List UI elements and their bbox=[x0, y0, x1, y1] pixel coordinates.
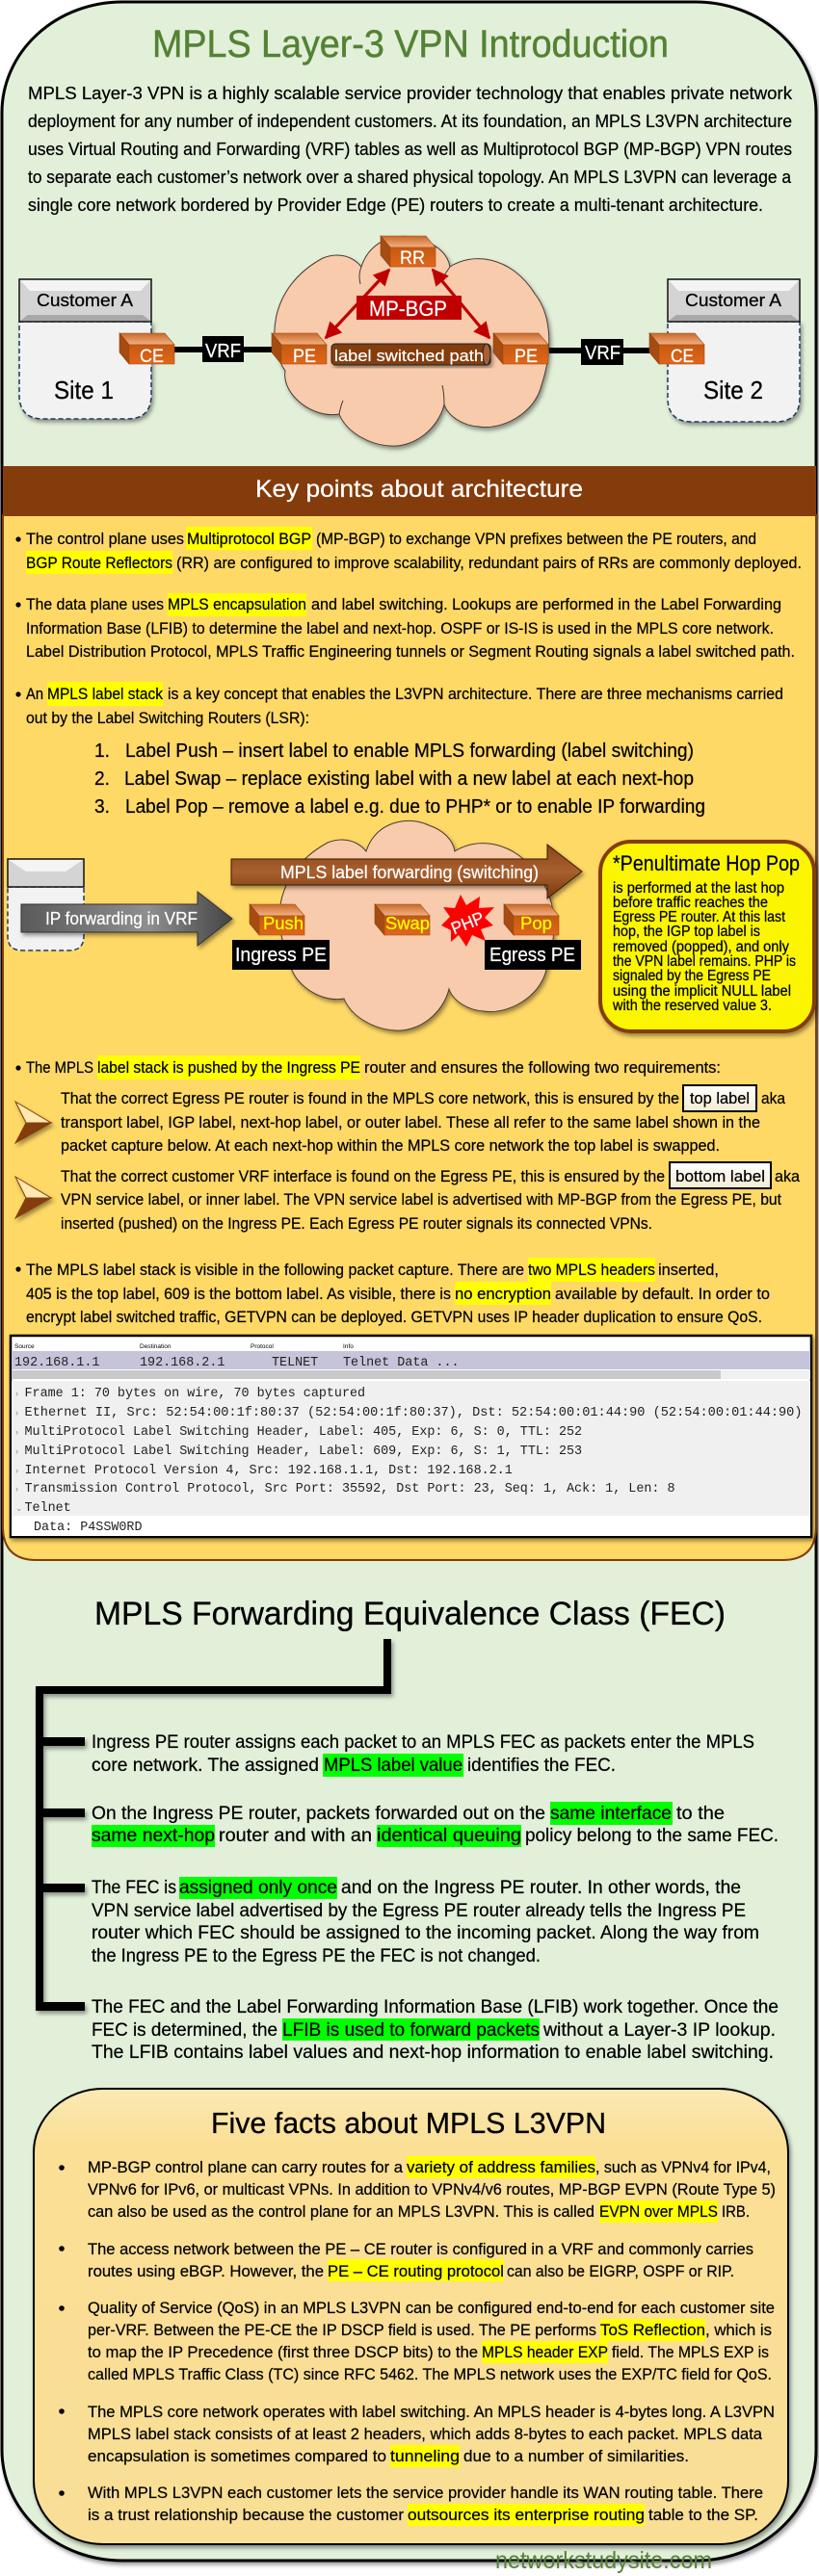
PHP burst bbox=[441, 895, 494, 947]
bullet: label stack: out by the Label Switching Routers (LSR): bbox=[26, 709, 309, 727]
bullet: packet capture explanation: encrypt label switched traffic, GETVPN can be deployed. GETVPN uses IP header duplication to ensure QoS. bbox=[26, 1308, 762, 1326]
fact 2: PE – CE routing protocol bbox=[328, 2262, 504, 2280]
FEC point 3: The FEC is bbox=[92, 1878, 176, 1898]
callout: Penultimate Hop Pop: before traffic reaches the bbox=[613, 895, 768, 911]
fact 2: can also be EIGRP, OSPF or RIP. bbox=[507, 2262, 734, 2280]
requirement: bottom label: VPN service label, or inner label. The VPN service label is advertised with MP-BGP from the Egress PE, but bbox=[61, 1190, 781, 1209]
intro text block: to separate each customer’s network over a shared physical topology. An MPLS L3VPN can leverage a bbox=[28, 168, 792, 187]
customer A site 1: Customer A bbox=[37, 291, 133, 310]
bullet: data plane: and label switching. Lookups are performed in the Label Forwarding bbox=[311, 595, 781, 613]
numbered list: label operations: Label Swap – replace existing label with a new label at each next-hop bbox=[124, 768, 694, 790]
fact 1: IRB. bbox=[722, 2202, 750, 2221]
scrollbar bbox=[12, 1370, 810, 1379]
customer A site 2: Site 2 bbox=[703, 376, 763, 404]
requirement: top label: aka bbox=[761, 1089, 785, 1107]
Ingress PE label: Ingress PE bbox=[235, 945, 327, 966]
bullet: label stack: An bbox=[26, 685, 43, 703]
fact 3: per-VRF. Between the PE-CE the IP DSCP field is used. The PE performs bbox=[88, 2321, 596, 2339]
fact 1: VPNv6 for IPv6, or multicast VPNs. In addition to VPNv4/v6 routes, MP-BGP EVPN (Route Type 5) bbox=[88, 2180, 776, 2199]
packet detail tree: Internet Protocol Version 4, Src: 192.168.1.1, Dst: 192.168.2.1 bbox=[25, 1464, 513, 1478]
customer site box bbox=[8, 859, 84, 950]
router PE right: PE bbox=[515, 347, 538, 367]
diagram: MPLS L3VPN topology bbox=[19, 236, 800, 446]
FEC point 1: identifies the FEC. bbox=[467, 1756, 616, 1776]
router PE left bbox=[272, 333, 327, 367]
FEC point 4 bbox=[92, 1997, 779, 2063]
packet detail tree: Telnet bbox=[25, 1501, 71, 1516]
fact 3: Quality of Service (QoS) in an MPLS L3VPN can be configured end-to-end for each customer site bbox=[88, 2299, 775, 2317]
numbered list: label operations: 2. bbox=[94, 768, 110, 790]
FEC point 4: The FEC and the Label Forwarding Information Base (LFIB) work together. Once the bbox=[92, 1997, 779, 2017]
callout: Penultimate Hop Pop: removed (popped), and only bbox=[613, 939, 789, 955]
requirement: bottom label: aka bbox=[775, 1167, 801, 1185]
requirement: bottom label: That the correct customer VRF interface is found on the Egress PE, this is ensured by the bbox=[61, 1167, 665, 1185]
selected packet row: 192.168.1.1 bbox=[14, 1356, 99, 1370]
column headers: Destination bbox=[140, 1343, 172, 1350]
bullet: data plane: MPLS encapsulation bbox=[168, 595, 306, 613]
packet detail tree: › bbox=[15, 1427, 18, 1437]
bullet: label stack requirements: router and ensures the following two requirements: bbox=[364, 1058, 721, 1077]
fact 3: MPLS header EXP bbox=[482, 2343, 608, 2361]
boxed term: bottom label bbox=[670, 1162, 771, 1188]
FEC point 2: On the Ingress PE router, packets forwarded out on the bbox=[92, 1804, 545, 1824]
packet detail tree: Transmission Control Protocol, Src Port: 35592, Dst Port: 23, Seq: 1, Ack: 1, Len: 8 bbox=[25, 1482, 674, 1496]
selected packet row: Telnet Data ... bbox=[343, 1356, 460, 1370]
FEC point 1: MPLS label value bbox=[324, 1756, 462, 1776]
bullet: packet capture explanation: two MPLS headers bbox=[528, 1261, 655, 1279]
requirement: top label bbox=[61, 1085, 785, 1155]
callout: Penultimate Hop Pop: is performed at the last hop bbox=[613, 880, 784, 897]
VRF label left: VRF bbox=[205, 341, 241, 362]
packet capture window bbox=[11, 1336, 811, 1537]
packet detail tree: › bbox=[15, 1484, 18, 1494]
heading: FEC: MPLS Forwarding Equivalence Class (FEC) bbox=[94, 1596, 726, 1632]
callout: Penultimate Hop Pop: hop, the IGP top label is bbox=[613, 924, 760, 940]
selected packet row: TELNET bbox=[272, 1356, 318, 1370]
arrow: IP forwarding in VRF: IP forwarding in VRF bbox=[45, 909, 198, 928]
website credit: networkstudysite.com bbox=[495, 2547, 712, 2574]
bullet: packet capture explanation bbox=[15, 1258, 770, 1326]
bullet: data plane: The data plane uses bbox=[26, 595, 164, 613]
FEC point 3: the Ingress PE to the Egress PE the FEC is not changed. bbox=[92, 1946, 541, 1966]
FEC point 3 bbox=[92, 1877, 759, 1966]
FEC point 2: same next-hop bbox=[92, 1826, 215, 1846]
router CE right bbox=[649, 333, 704, 367]
router PE left: PE bbox=[293, 347, 316, 367]
FEC point 2: same interface bbox=[550, 1804, 672, 1824]
router CE left bbox=[119, 333, 174, 367]
router Push bbox=[250, 904, 304, 935]
bullet: data plane: Information Base (LFIB) to determine the label and next-hop. OSPF or IS-IS is used in the MPLS core network. bbox=[26, 619, 774, 637]
title: MPLS Layer-3 VPN Introduction bbox=[152, 23, 669, 65]
packet detail tree: Data: P4SSW0RD bbox=[34, 1521, 143, 1535]
callout: Penultimate Hop Pop: using the implicit NULL label bbox=[613, 983, 791, 1000]
fact 4: tunneling bbox=[390, 2447, 460, 2465]
packet detail tree: MultiProtocol Label Switching Header, Label: 405, Exp: 6, S: 0, TTL: 252 bbox=[25, 1425, 582, 1440]
packet detail tree: › bbox=[15, 1408, 18, 1418]
fact 1 bbox=[59, 2156, 776, 2223]
column headers: Protocol bbox=[251, 1343, 274, 1350]
bullet: packet capture explanation: no encryption bbox=[455, 1285, 551, 1303]
bullet: control plane: Multiprotocol BGP bbox=[187, 530, 311, 548]
packet detail tree: Frame 1: 70 bytes on wire, 70 bytes captured bbox=[25, 1387, 365, 1401]
requirement: top label: packet capture below. At each next-hop within the MPLS core network the top label is swapped. bbox=[61, 1136, 720, 1155]
VRF label right: VRF bbox=[585, 343, 621, 364]
router Push: Push bbox=[263, 914, 304, 933]
diagram: label operations bbox=[8, 820, 814, 1031]
fact 2: The access network between the PE – CE router is configured in a VRF and commonly carries bbox=[88, 2240, 753, 2258]
callout: Penultimate Hop Pop: the VPN label remains. PHP is bbox=[613, 953, 796, 970]
fact 1: MP-BGP control plane can carry routes for a bbox=[88, 2158, 404, 2176]
arrow: MPLS label forwarding bbox=[231, 845, 582, 898]
packet detail tree bbox=[12, 1381, 810, 1536]
router PE right bbox=[493, 333, 548, 367]
bullet: label stack: is a key concept that enables the L3VPN architecture. There are three mechanisms carried bbox=[168, 685, 783, 703]
cloud: MPLS core bbox=[279, 820, 554, 1030]
panel background bbox=[3, 515, 816, 1560]
icon: arrow bullet 2 bbox=[15, 1177, 51, 1218]
fact 3 bbox=[59, 2299, 775, 2383]
router Swap: Swap bbox=[385, 914, 430, 933]
packet detail tree: ⌄ bbox=[15, 1503, 23, 1513]
bullet: control plane: (MP-BGP) to exchange VPN prefixes between the PE routers, and bbox=[316, 530, 756, 548]
FEC point 3: router which FEC should be assigned to the incoming packet. Along the way from bbox=[92, 1923, 759, 1943]
router Pop bbox=[504, 904, 559, 935]
Ingress PE label bbox=[232, 940, 330, 970]
selected packet row bbox=[12, 1351, 810, 1370]
router RR: RR bbox=[400, 248, 425, 269]
numbered list: label operations: Label Pop – remove a label e.g. due to PHP* or to enable IP forwarding bbox=[125, 796, 705, 818]
bullet: packet capture explanation: available by default. In order to bbox=[555, 1285, 770, 1303]
FEC point 3: VPN service label advertised by the Egress PE router already tells the Ingress PE bbox=[92, 1901, 746, 1921]
fact 3: field. The MPLS EXP is bbox=[612, 2343, 769, 2361]
column headers bbox=[14, 1343, 354, 1350]
numbered list: label operations: Label Push – insert label to enable MPLS forwarding (label switching) bbox=[125, 741, 694, 762]
fact 5: outsources its enterprise routing bbox=[408, 2506, 645, 2524]
packet detail tree: Ethernet II, Src: 52:54:00:1f:80:37 (52:54:00:1f:80:37), Dst: 52:54:00:01:44:90 (52:54:00:01:44:90) bbox=[25, 1406, 802, 1420]
intro text block: MPLS Layer-3 VPN is a highly scalable service provider technology that enables private network bbox=[28, 84, 793, 103]
bullet: label stack requirements: The MPLS bbox=[26, 1058, 93, 1077]
fact 3: called MPLS Traffic Class (TC) since RFC 5462. The MPLS network uses the EXP/TC field for QoS. bbox=[88, 2365, 772, 2383]
fact 3: , which is bbox=[705, 2321, 772, 2339]
Egress PE label: Egress PE bbox=[489, 945, 575, 966]
callout: Penultimate Hop Pop bbox=[600, 842, 814, 1031]
label switched path tube: label switched path bbox=[334, 347, 484, 365]
callout: Penultimate Hop Pop: signaled by the Egress PE bbox=[613, 968, 771, 984]
heading: five facts: Five facts about MPLS L3VPN bbox=[211, 2106, 606, 2140]
bullet: label stack requirements bbox=[15, 1055, 721, 1080]
MP-BGP label: MP-BGP bbox=[369, 297, 447, 321]
FEC point 2: router and with an bbox=[219, 1826, 372, 1846]
requirement: bottom label: inserted (pushed) on the Ingress PE. Each Egress PE router signals its connected VPNs. bbox=[61, 1214, 652, 1233]
numbered list: label operations bbox=[94, 741, 705, 818]
FEC point 2: identical queuing bbox=[377, 1826, 521, 1846]
FEC point 1 bbox=[92, 1732, 754, 1777]
heading bar bbox=[3, 466, 816, 515]
fact 1: variety of address families bbox=[407, 2158, 595, 2176]
FEC point 2: to the bbox=[676, 1804, 725, 1824]
FEC point 3: assigned only once bbox=[179, 1878, 337, 1898]
bullet: packet capture explanation: The MPLS label stack is visible in the following packet capture. There are bbox=[26, 1261, 524, 1279]
bullet: control plane bbox=[15, 527, 802, 574]
bullet: data plane: Label Distribution Protocol, MPLS Traffic Engineering tunnels or Segment Routing signals a label switched path. bbox=[26, 642, 795, 661]
bullet: label stack requirements: label stack is pushed by the Ingress PE bbox=[97, 1058, 360, 1077]
FEC point 4: without a Layer-3 IP lookup. bbox=[542, 2020, 776, 2041]
fact 4: due to a number of similarities. bbox=[463, 2447, 689, 2465]
fact 5 bbox=[59, 2484, 763, 2526]
FEC point 2: policy belong to the same FEC. bbox=[525, 1826, 779, 1846]
fact 1: EVPN over MPLS bbox=[599, 2202, 718, 2221]
fact 4: The MPLS core network operates with label switching. An MPLS header is 4-bytes long. A L3VPN bbox=[88, 2403, 775, 2421]
fact 4: encapsulation is sometimes compared to bbox=[88, 2447, 386, 2465]
FEC point 1: core network. The assigned bbox=[92, 1756, 319, 1776]
FEC point 2 bbox=[92, 1802, 779, 1847]
fact 1: can also be used as the control plane for an MPLS L3VPN. This is called bbox=[88, 2202, 594, 2221]
router CE left: CE bbox=[140, 347, 164, 367]
customer A site 2 bbox=[668, 279, 800, 422]
fact 2: routes using eBGP. However, the bbox=[88, 2262, 324, 2280]
intro text block: deployment for any number of independent customers. At its foundation, an MPLS L3VPN architecture bbox=[28, 112, 792, 131]
fact 5: With MPLS L3VPN each customer lets the service provider handle its WAN routing table. There bbox=[88, 2484, 763, 2502]
fact 5: is a trust relationship because the customer bbox=[88, 2506, 404, 2524]
customer A site 2: Customer A bbox=[685, 291, 781, 310]
bullet: control plane: (RR) are configured to improve scalability, redundant pairs of RRs are commonly deployed. bbox=[176, 554, 802, 572]
packet detail tree: MultiProtocol Label Switching Header, Label: 609, Exp: 6, S: 1, TTL: 253 bbox=[25, 1444, 582, 1459]
fact 4 bbox=[59, 2403, 775, 2467]
panel: five facts bbox=[34, 2089, 788, 2544]
fact 4: MPLS label stack consists of at least 2 headers, which adds 8-bytes to each packet. MPLS data bbox=[88, 2425, 763, 2443]
requirement: top label: That the correct Egress PE router is found in the MPLS core network, this is ensured by the bbox=[61, 1089, 679, 1107]
red MP-BGP arrows bbox=[326, 270, 489, 338]
bullet: packet capture explanation: 405 is the top label, 609 is the bottom label. As visible, there is bbox=[26, 1285, 451, 1303]
customer A site 1: Site 1 bbox=[54, 376, 114, 404]
links: CE to PE bbox=[173, 347, 649, 353]
FEC point 4: FEC is determined, the bbox=[92, 2020, 277, 2041]
FEC point 4: The LFIB contains label values and next-hop information to enable label switching. bbox=[92, 2043, 774, 2063]
fact 1: , such as VPNv4 for IPv4, bbox=[595, 2158, 771, 2176]
FEC point 4: LFIB is used to forward packets bbox=[282, 2020, 540, 2041]
bullet: control plane: The control plane uses bbox=[26, 530, 184, 548]
fact 5: table to the SP. bbox=[648, 2506, 758, 2524]
boxed term: top label: top label bbox=[690, 1089, 750, 1107]
intro text block bbox=[28, 84, 793, 215]
callout: Penultimate Hop Pop: Egress PE router. At this last bbox=[613, 909, 786, 925]
selected packet row: 192.168.2.1 bbox=[140, 1356, 225, 1370]
boxed term: top label bbox=[683, 1085, 756, 1111]
intro text block: single core network bordered by Provider Edge (PE) routers to create a multi-tenant architecture. bbox=[28, 195, 763, 215]
bullet: label stack: MPLS label stack bbox=[47, 685, 163, 703]
icon: arrow bullet 1 bbox=[15, 1102, 51, 1143]
requirement: top label: transport label, IGP label, next-hop label, or outer label. These all refer to the same label shown in the bbox=[61, 1113, 760, 1132]
numbered list: label operations: 3. bbox=[94, 796, 110, 818]
intro text block: uses Virtual Routing and Forwarding (VRF) tables as well as Multiprotocol BGP (MP-BGP) VPN routes bbox=[28, 140, 792, 159]
fact 3: ToS Reflection bbox=[600, 2321, 705, 2339]
router Pop: Pop bbox=[520, 914, 552, 933]
requirement: bottom label bbox=[61, 1162, 801, 1233]
panel: key points about architecture bbox=[3, 466, 816, 1560]
fact 2 bbox=[59, 2240, 753, 2281]
boxed term: bottom label: bottom label bbox=[675, 1167, 765, 1185]
fact 3: to map the IP Precedence (first three DSCP bits) to the bbox=[88, 2343, 478, 2361]
arrow: IP forwarding in VRF bbox=[21, 892, 232, 946]
arrow: MPLS label forwarding: MPLS label forwarding (switching) bbox=[280, 863, 539, 882]
bullet: label stack bbox=[15, 682, 783, 727]
FEC point 1: Ingress PE router assigns each packet to an MPLS FEC as packets enter the MPLS bbox=[92, 1732, 754, 1753]
column headers: Source bbox=[14, 1343, 35, 1350]
router CE right: CE bbox=[671, 347, 694, 367]
PHP burst: PHP bbox=[448, 908, 487, 938]
column headers: Info bbox=[343, 1343, 354, 1350]
packet detail tree: › bbox=[15, 1389, 18, 1398]
router Swap bbox=[375, 904, 430, 935]
connector tree bbox=[36, 1639, 391, 2011]
cloud: MPLS core bbox=[275, 236, 549, 446]
callout: Penultimate Hop Pop: with the reserved value 3. bbox=[612, 998, 772, 1014]
bullet: control plane: BGP Route Reflectors bbox=[26, 554, 172, 572]
packet detail tree: › bbox=[15, 1446, 18, 1456]
callout: Penultimate Hop Pop: *Penultimate Hop Pop bbox=[613, 851, 800, 875]
FEC point 3: and on the Ingress PE router. In other words, the bbox=[341, 1878, 741, 1898]
bullet: data plane bbox=[15, 593, 795, 661]
Egress PE label bbox=[485, 940, 581, 970]
packet detail tree: › bbox=[15, 1466, 18, 1475]
numbered list: label operations: 1. bbox=[94, 741, 110, 762]
router RR bbox=[381, 236, 436, 269]
heading bar: Key points about architecture bbox=[255, 476, 583, 503]
customer A site 1 bbox=[19, 279, 151, 419]
bullet: packet capture explanation: inserted, bbox=[658, 1261, 719, 1279]
